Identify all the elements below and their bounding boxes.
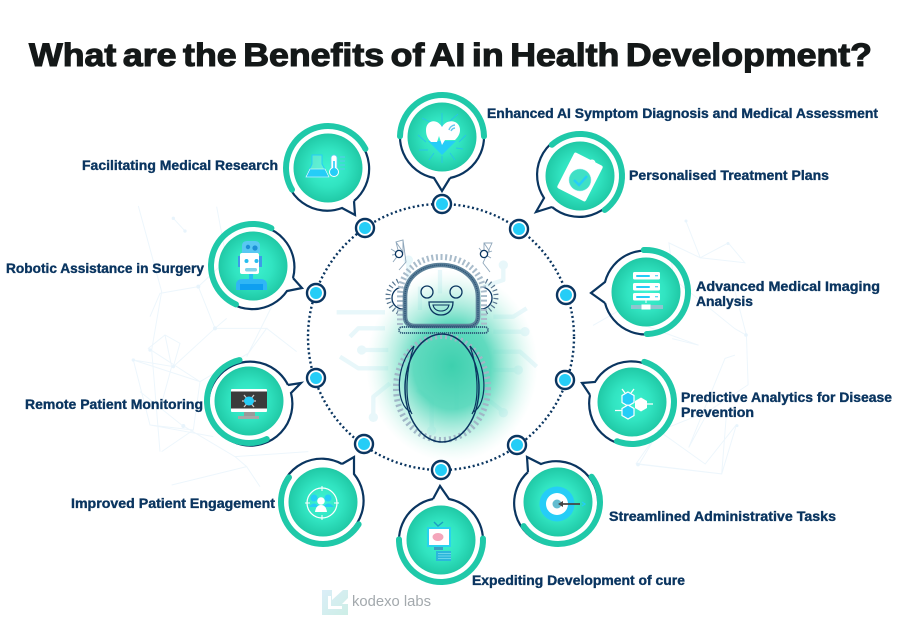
background network: right cluster — [593, 220, 748, 474]
label line 2: Prevention — [681, 405, 754, 420]
panel: robotic assistance in surgery — [6, 211, 308, 321]
icon: servers — [631, 272, 663, 309]
robot head — [399, 257, 488, 333]
label: Predictive Analytics for Disease — [681, 390, 892, 405]
robot antennas — [391, 240, 492, 272]
icon: target and arrow — [540, 486, 585, 522]
icon: people in crosshair — [305, 486, 339, 520]
title: What are the Benefits of AI in Health Development? — [29, 37, 872, 73]
label: Expediting Development of cure — [472, 573, 685, 588]
robot body — [396, 334, 488, 442]
label: Advanced Medical Imaging — [696, 279, 880, 294]
icon: robot — [236, 241, 267, 290]
icon: brain on monitor — [427, 522, 451, 561]
icon: clipboard with check — [557, 152, 603, 202]
panel: predictive analytics — [580, 350, 892, 454]
icon: circuit heart — [418, 113, 466, 163]
panel: enhanced AI symptom diagnosis — [399, 94, 879, 191]
circuit traces behind robot — [337, 255, 537, 435]
logo mark — [322, 590, 348, 615]
background network: left cluster — [132, 206, 308, 487]
robot ears — [388, 281, 496, 312]
dotted orbit ring — [308, 204, 574, 470]
label: Facilitating Medical Research — [82, 158, 278, 173]
panel: improved patient engagement — [71, 444, 381, 560]
central glow — [366, 270, 538, 462]
logo wordmark: kodexo labs — [352, 594, 431, 610]
panel: streamlined administrative tasks — [499, 443, 836, 561]
label: Enhanced AI Symptom Diagnosis and Medical Assessment — [487, 106, 879, 121]
panel: remote patient monitoring — [25, 345, 305, 457]
label: Streamlined Administrative Tasks — [609, 509, 836, 524]
panel: expediting development of cure — [398, 486, 685, 588]
panel: advanced medical imaging analysis — [591, 248, 880, 336]
connector nodes on orbit — [307, 195, 575, 479]
icon: flask and thermometer — [306, 155, 345, 177]
label: Improved Patient Engagement — [71, 496, 276, 511]
label: Robotic Assistance in Surgery — [6, 261, 205, 276]
label line 2: Analysis — [696, 294, 753, 309]
panel: personalised treatment plans — [521, 117, 829, 235]
logo: kodexo labs — [322, 590, 431, 615]
panel: facilitating medical research — [82, 110, 386, 226]
label: Remote Patient Monitoring — [25, 397, 203, 412]
icon: molecule — [615, 389, 653, 419]
label: Personalised Treatment Plans — [629, 168, 829, 183]
central robot illustration — [388, 240, 496, 442]
icon: monitor — [231, 389, 267, 419]
